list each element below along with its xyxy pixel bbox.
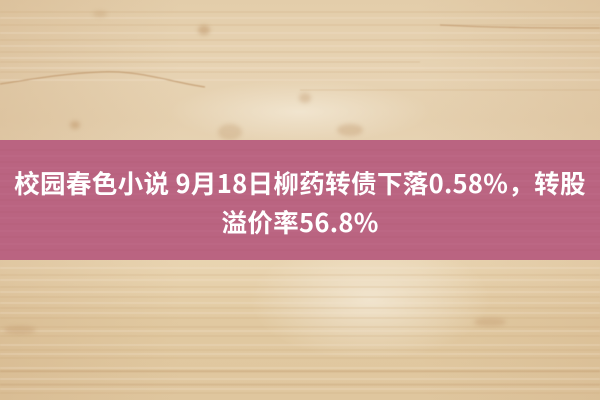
title text (14, 164, 586, 240)
title text: 校园春色小说 9月18日柳药转债下落0.58%，转股 (14, 164, 586, 201)
title text: 溢价率56.8% (221, 203, 379, 240)
pink title band (0, 140, 600, 260)
